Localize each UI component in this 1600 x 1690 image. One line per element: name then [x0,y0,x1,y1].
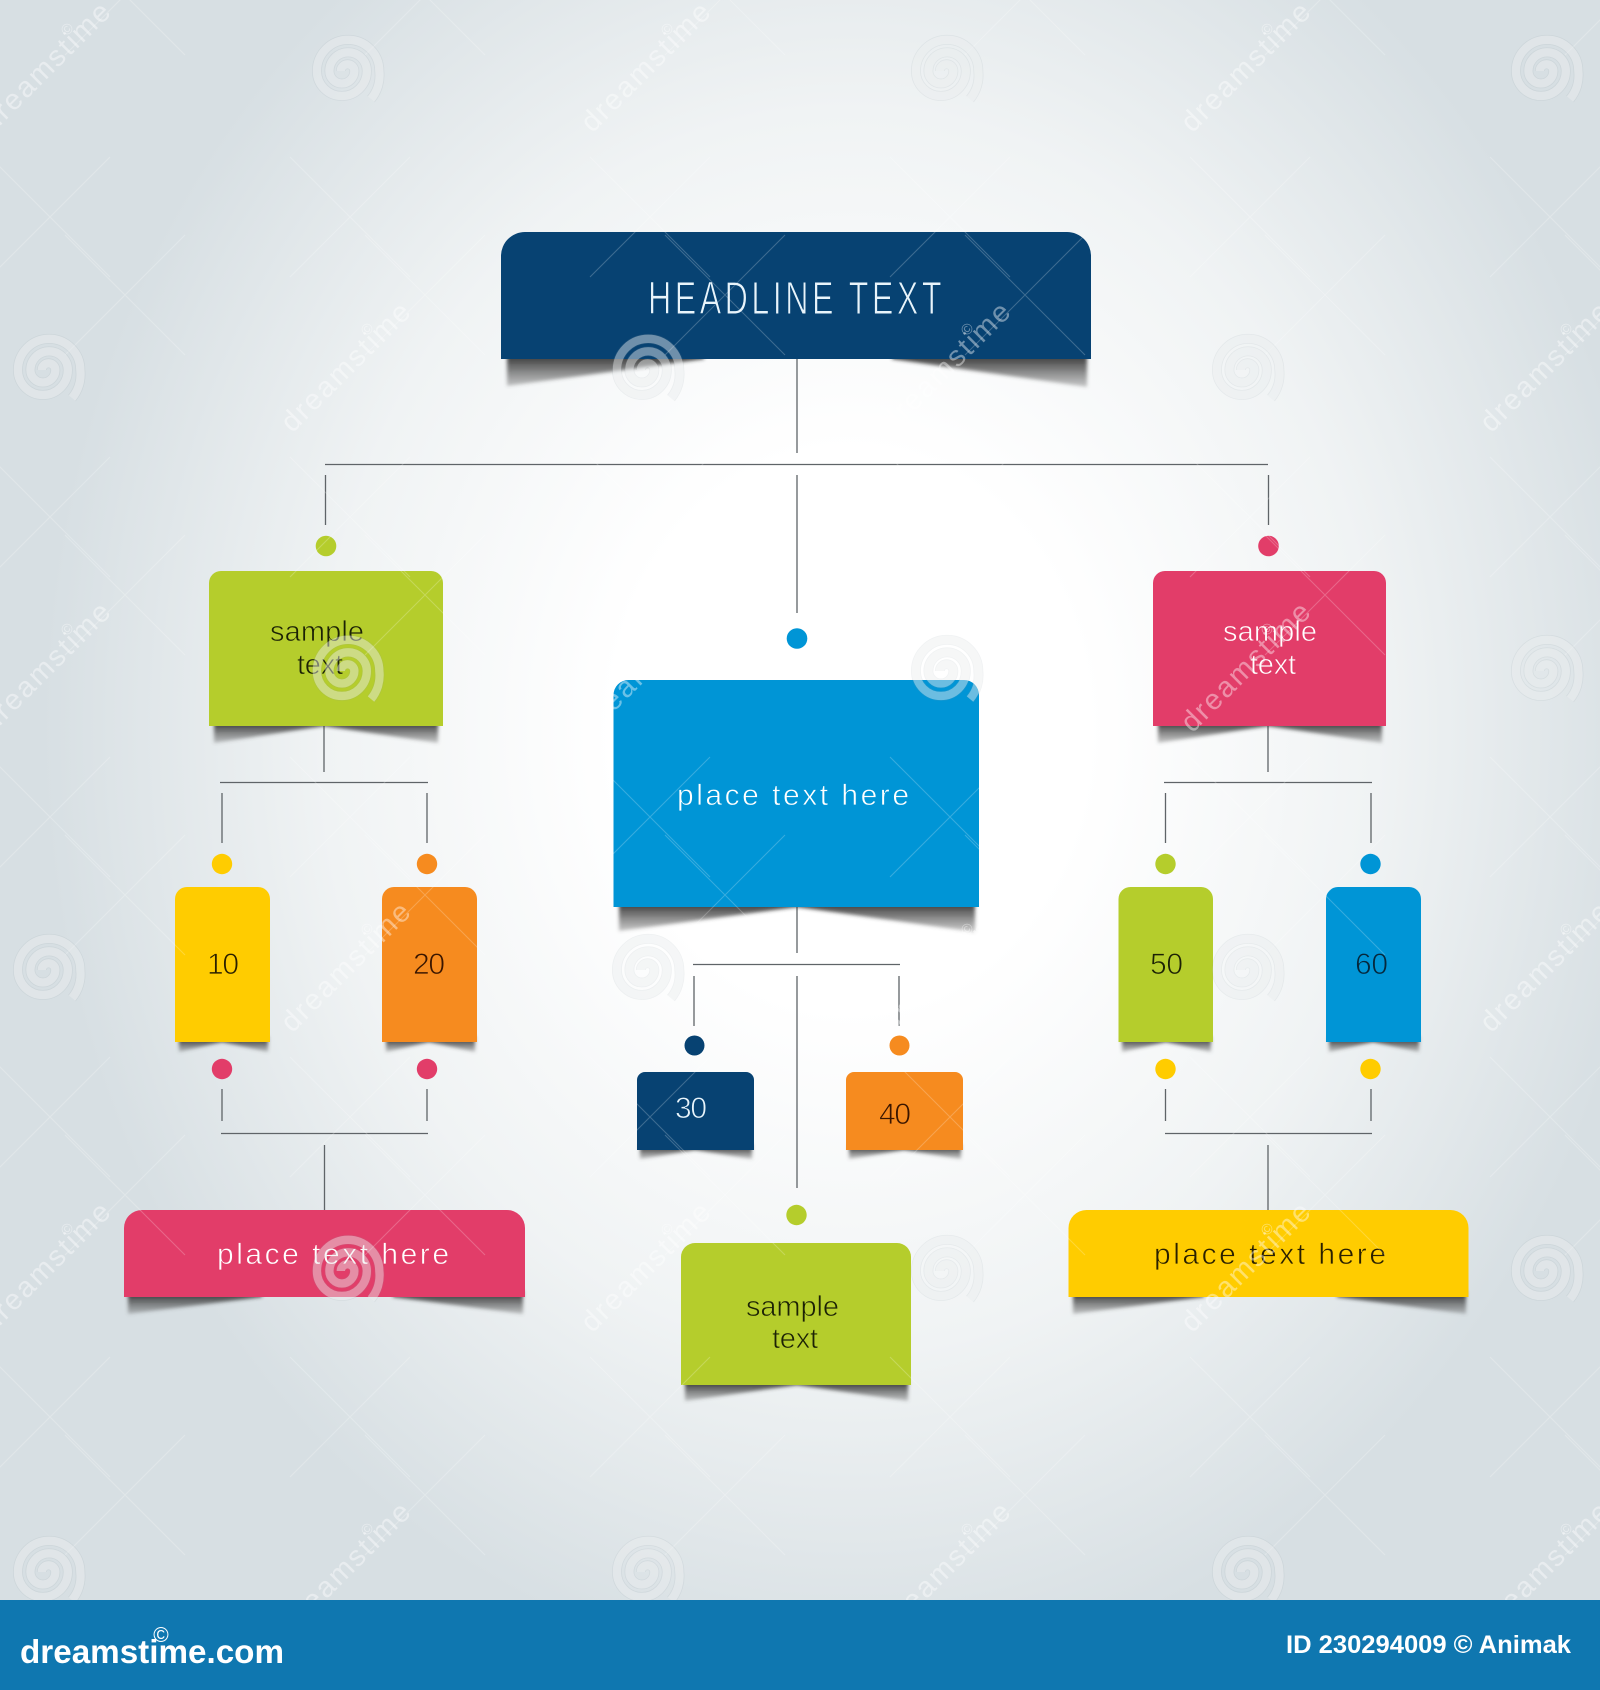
watermark overlay: © [358,1520,377,1539]
node: dot above bottom sample [786,1205,807,1225]
watermark overlay: © [1557,320,1576,339]
text: place text here: place text here [677,779,909,812]
watermark overlay: dreamstime [575,595,719,739]
node: dot above 20 [417,854,437,874]
node: dot above 50 [1155,854,1176,874]
panel: bottom center sample text [681,1243,911,1401]
text: 30: 30 [675,1092,707,1125]
watermark overlay: © [58,620,77,639]
node: center branch dot [787,628,807,649]
text: sample text [746,1291,839,1355]
panel: center place text here [614,680,979,932]
text: sample text: text [297,649,343,681]
panel: left sample text [209,571,443,743]
panel: right sample text [1153,571,1386,743]
node: dot above 60 [1360,854,1381,874]
panel: bottom right place text here [1068,1210,1468,1314]
panel: box 30 [637,1072,754,1159]
text: place text here: place text here [217,1238,449,1271]
watermark overlay: © [958,920,977,939]
panel: box 50 [1118,887,1213,1052]
watermark overlay: © [958,320,977,339]
watermark overlay: dreamstime [275,895,419,1039]
watermark overlay: dreamstime [1175,595,1319,739]
text: sample text [1223,616,1317,681]
watermark overlay: dreamstime [1175,1195,1319,1339]
text: sample text: text [772,1323,818,1355]
heading: headline text: HEADLINE TEXT [648,272,945,324]
panel: box 10 [175,887,270,1052]
text: 50: 50 [1150,948,1183,981]
watermark overlay: © [658,620,677,639]
text: sample text [270,616,364,681]
text: 10: 10 [207,948,239,981]
watermark overlay: © [358,320,377,339]
node: right branch dot [1258,536,1279,556]
watermark overlay: © [1258,1220,1277,1239]
node: dot above 30 [684,1036,704,1056]
text: sample text: sample [1223,616,1317,648]
watermark overlay: dreamstime [875,895,1019,1039]
node: left branch dot [316,536,336,556]
watermark overlay: © [1258,620,1277,639]
footer logo: © [153,1624,169,1647]
node: dot below 20 [417,1059,437,1079]
footer bar [0,1600,1600,1690]
watermark overlay: dreamstime [875,295,1019,439]
panel: box 20 [382,887,477,1052]
watermark overlay: © [958,1520,977,1539]
watermark overlay: © [658,20,677,39]
text: place text here: place text here [1154,1238,1386,1271]
watermark overlay: © [1258,20,1277,39]
panel: headline [501,232,1091,387]
watermark overlay: © [1557,1520,1576,1539]
panel: bottom left place text here [124,1210,525,1314]
text: 60: 60 [1355,948,1388,981]
footer logo: dreamstime.com [20,1633,284,1670]
node: dot below 50 [1155,1059,1176,1079]
text: 20: 20 [413,948,445,981]
text: sample text: sample [270,616,364,648]
watermark overlay: dreamstime [275,295,419,439]
watermark overlay: dreamstime [575,1195,719,1339]
node: dot below 60 [1360,1059,1381,1079]
watermark overlay: © [58,20,77,39]
text: 40: 40 [879,1098,911,1131]
node: dot above 10 [212,854,232,874]
text: sample text: sample [746,1291,839,1323]
node: dot below 10 [212,1059,232,1079]
watermark overlay: © [58,1220,77,1239]
text: sample text: text [1250,649,1296,681]
node: dot above 40 [890,1036,910,1056]
watermark overlay: © [658,1220,677,1239]
connector lines [220,359,1372,1210]
panel: box 60 [1326,887,1421,1052]
watermark overlay: dreamstime [875,1495,1019,1639]
watermark overlay: © [358,920,377,939]
footer credit: ID 230294009 © Animak [1286,1631,1571,1659]
watermark overlay: dreamstime [275,1495,419,1639]
panel: box 40 [846,1072,963,1159]
watermark overlay: © [1557,920,1576,939]
